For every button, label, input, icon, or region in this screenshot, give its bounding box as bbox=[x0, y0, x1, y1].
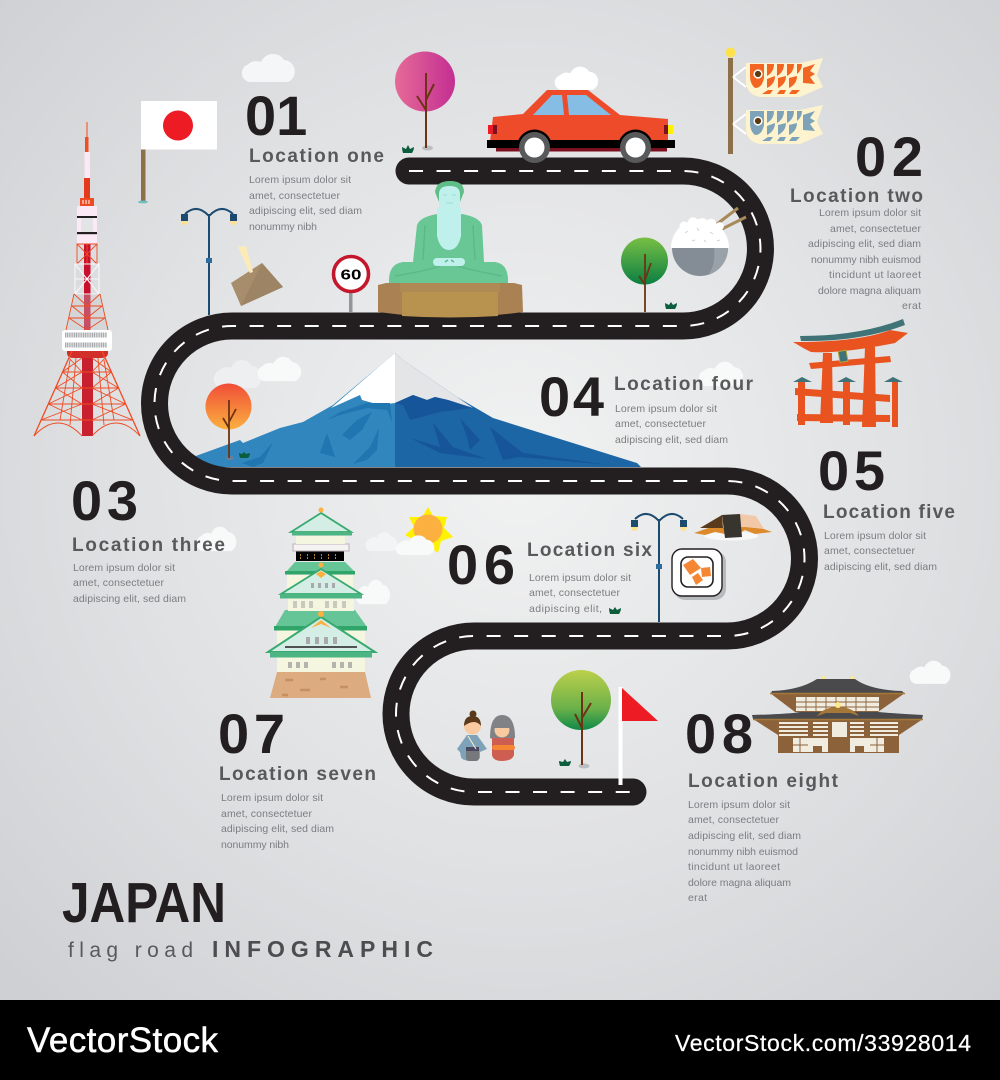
icon: speed limit sign: 60 bbox=[340, 268, 362, 284]
text: location six description bbox=[529, 572, 631, 615]
footer bar: VectorStock.com/33928014 bbox=[675, 1030, 971, 1056]
cloud: near location three bbox=[197, 527, 236, 551]
cloud: above mountain, faint bbox=[214, 360, 261, 388]
text: location two description: erat bbox=[902, 300, 921, 312]
title: JAPAN: JAPAN bbox=[62, 871, 226, 935]
cloud: behind castle bbox=[356, 580, 390, 604]
text: location six description: adipiscing elit, bbox=[529, 603, 602, 615]
icon: kimono couple bbox=[457, 710, 515, 761]
text: location four description bbox=[615, 403, 728, 446]
subtitle bbox=[68, 936, 433, 962]
text: location seven description: adipiscing elit, sed diam bbox=[221, 823, 334, 835]
text: location seven description: amet, consectetuer bbox=[221, 808, 312, 820]
subtitle: flag road bbox=[68, 939, 193, 962]
icon: green tree bbox=[621, 238, 677, 312]
cloud: near location four bbox=[699, 362, 743, 386]
text: location three description: adipiscing elit, sed diam bbox=[73, 593, 186, 605]
number 07: 07 bbox=[218, 702, 285, 765]
icon: street lamp bbox=[181, 209, 237, 315]
text: location three description: Lorem ipsum dolor sit bbox=[73, 562, 175, 574]
icon: Great Buddha statue bbox=[378, 181, 523, 318]
icon: Mount Fuji bbox=[193, 353, 641, 467]
text: location eight description: nonummy nibh euismod bbox=[688, 846, 798, 858]
cloud: above car bbox=[555, 67, 598, 90]
text: location four description: amet, consectetuer bbox=[615, 418, 706, 430]
icon: orange tree bbox=[206, 384, 252, 460]
text: location two description bbox=[808, 207, 922, 312]
icon: rice bowl with chopsticks bbox=[671, 208, 746, 276]
text: location six description: Lorem ipsum dolor sit bbox=[529, 572, 631, 584]
title: location one: Location one bbox=[249, 146, 384, 167]
title: location three: Location three bbox=[72, 535, 225, 556]
cloud: top left bbox=[242, 54, 295, 82]
text: location eight description: dolore magna aliquam bbox=[688, 877, 791, 889]
icon: eel nigiri sushi bbox=[694, 514, 772, 540]
title: location four: Location four bbox=[614, 374, 754, 395]
number 05: 05 bbox=[818, 439, 885, 502]
icon: salmon sushi roll bbox=[672, 549, 726, 600]
text: location two description: tincidunt ut laoreet bbox=[829, 269, 921, 281]
text: location five description bbox=[824, 530, 937, 573]
text: location seven description bbox=[221, 792, 334, 851]
text: location seven description: Lorem ipsum dolor sit bbox=[221, 792, 323, 804]
title: location eight: Location eight bbox=[688, 771, 839, 792]
text: location two description: dolore magna aliquam bbox=[818, 285, 921, 297]
text: location seven description: nonummy nibh bbox=[221, 839, 289, 851]
cloud: above mountain, white bbox=[258, 357, 301, 381]
icon: Osaka castle bbox=[268, 508, 375, 698]
road bbox=[154, 171, 804, 792]
text: location eight description: erat bbox=[688, 892, 707, 904]
text: location six description: amet, consectetuer bbox=[529, 587, 620, 599]
icon: pink tree bbox=[395, 52, 455, 153]
text: location eight description: amet, consectetuer bbox=[688, 814, 780, 826]
icon: Japanese flag bbox=[138, 101, 217, 203]
text: location one description: nonummy nibh bbox=[249, 221, 317, 233]
title: location five: Location five bbox=[823, 502, 955, 523]
title: location six: Location six bbox=[527, 540, 652, 561]
text: location one description bbox=[249, 174, 362, 233]
text: location five description: Lorem ipsum dolor sit bbox=[824, 530, 926, 542]
icon: finish flag bbox=[618, 687, 658, 785]
text: location three description bbox=[73, 562, 186, 605]
text: location four description: Lorem ipsum dolor sit bbox=[615, 403, 717, 415]
number 03: 03 bbox=[71, 469, 138, 532]
text: location two description: nonummy nibh euismod bbox=[811, 254, 921, 266]
text: location one description: amet, consectetuer bbox=[249, 190, 340, 202]
text: location two description: amet, consectetuer bbox=[830, 223, 922, 235]
number 08: 08 bbox=[685, 702, 753, 765]
icon: red car bbox=[487, 90, 675, 163]
number 02: 02 bbox=[855, 125, 923, 188]
cloud: beside castle, faint bbox=[366, 532, 397, 551]
text: location five description: adipiscing elit, sed diam bbox=[824, 561, 937, 573]
icon: rice cracker on stick bbox=[231, 246, 283, 306]
text: location eight description: tincidunt ut laoreet bbox=[688, 861, 780, 873]
footer bar bbox=[0, 1000, 1000, 1080]
text: location four description: adipiscing elit, sed diam bbox=[615, 434, 728, 446]
text: location five description: amet, consectetuer bbox=[824, 545, 916, 557]
icon: lime tree bbox=[551, 670, 611, 768]
subtitle: INFOGRAPHIC bbox=[212, 936, 433, 962]
text: location eight description bbox=[688, 799, 801, 904]
icon: Itsukushima torii gate bbox=[793, 319, 908, 427]
cloud: near temple bbox=[910, 661, 950, 684]
icon: street lamp two bbox=[631, 514, 687, 622]
footer bar: VectorStock bbox=[27, 1021, 218, 1060]
number 06: 06 bbox=[447, 533, 515, 596]
text: location two description: adipiscing elit, sed diam bbox=[808, 238, 921, 250]
title: location two: Location two bbox=[790, 186, 923, 207]
icon: Tokyo tower bbox=[34, 122, 140, 436]
icon: small grass bbox=[609, 607, 621, 614]
text: location eight description: adipiscing elit, sed diam bbox=[688, 830, 801, 842]
number 01: 01 bbox=[245, 84, 307, 147]
icon: koinobori carp streamers bbox=[726, 48, 823, 154]
text: location one description: Lorem ipsum dolor sit bbox=[249, 174, 351, 186]
icon: speed limit sign bbox=[334, 256, 368, 312]
title: location seven: Location seven bbox=[219, 764, 376, 785]
text: location three description: amet, consectetuer bbox=[73, 577, 164, 589]
text: location two description: Lorem ipsum dolor sit bbox=[819, 207, 921, 219]
text: location one description: adipiscing elit, sed diam bbox=[249, 205, 362, 217]
icon: Todaiji temple bbox=[752, 675, 923, 753]
icon: sun bbox=[396, 507, 453, 555]
number 04: 04 bbox=[539, 365, 604, 428]
text: location eight description: Lorem ipsum dolor sit bbox=[688, 799, 790, 811]
